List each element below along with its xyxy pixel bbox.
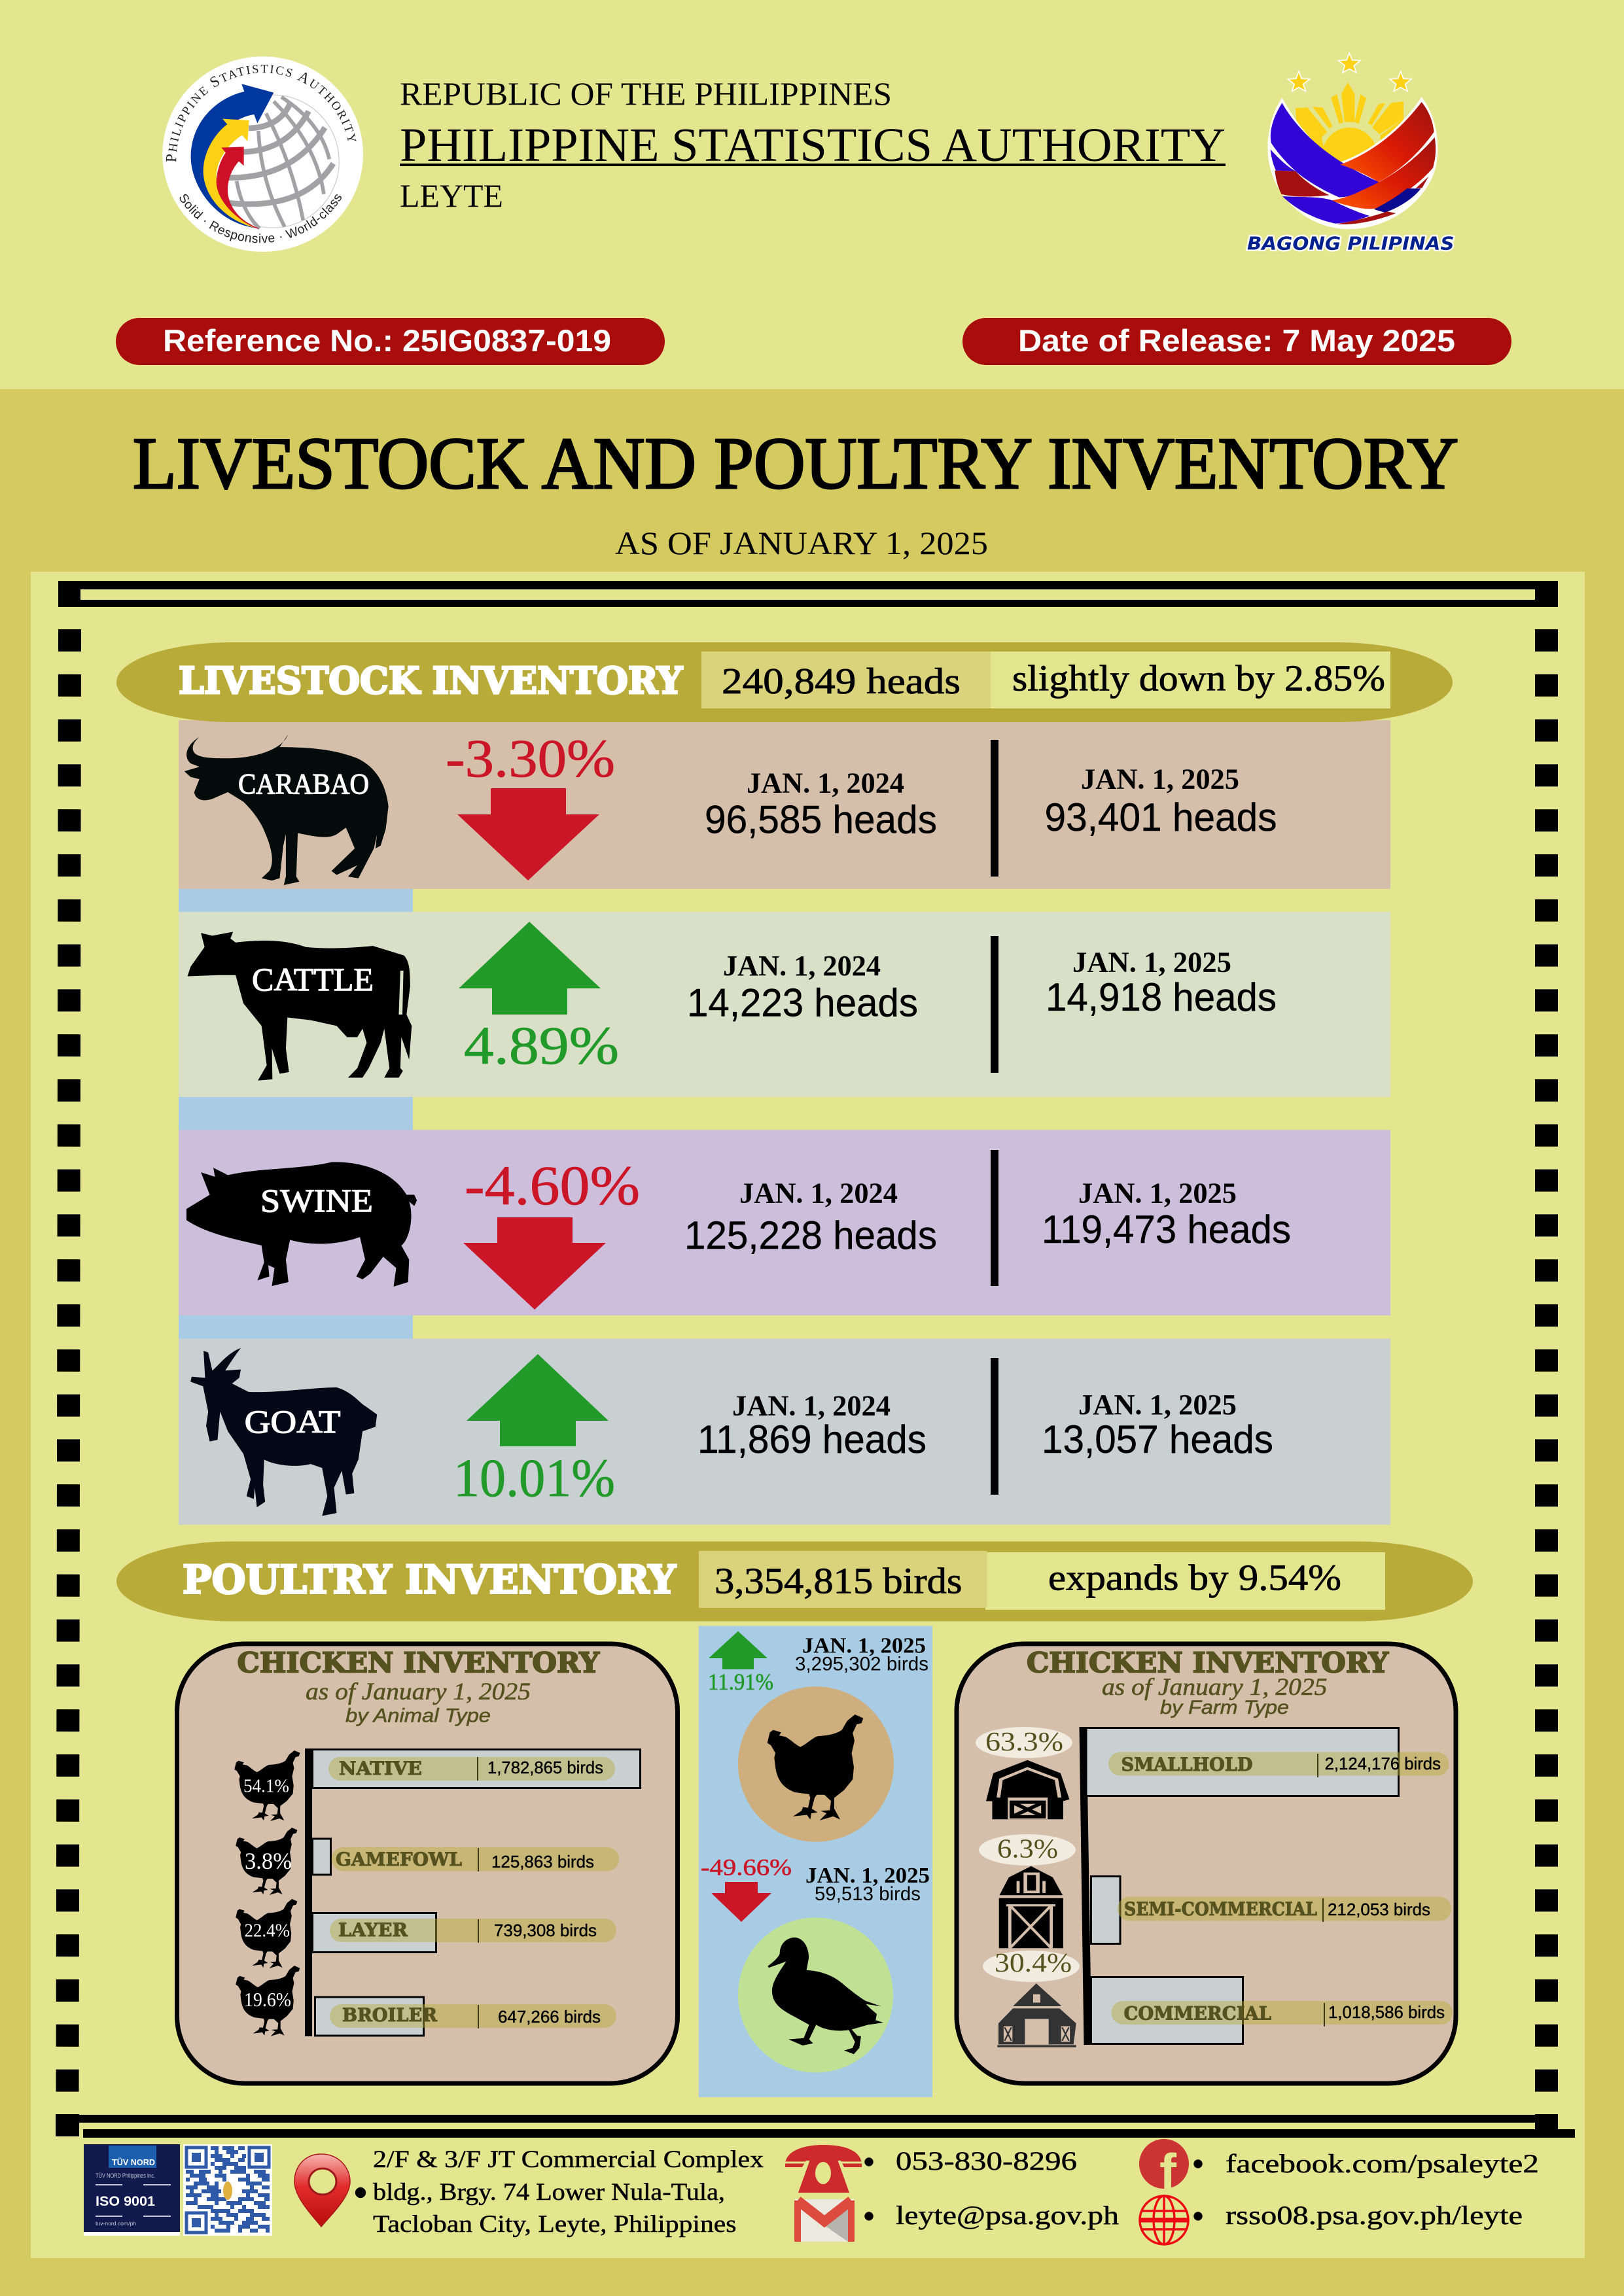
subheading bbox=[1102, 1674, 1327, 1718]
stat: cattle 2024 bbox=[687, 950, 918, 1024]
icon: facebook bbox=[1139, 2139, 1189, 2200]
bar: gamefowl: 125,863 birds bbox=[491, 1852, 594, 1871]
stat: carabao 2024 bbox=[705, 767, 937, 841]
icon: semi-commercial barn bbox=[999, 1866, 1063, 1948]
banner: poultry inventory: expands by 9.54% bbox=[1048, 1558, 1341, 1599]
bar: broiler: 647,266 birds bbox=[498, 2007, 601, 2026]
change: carabao percent: -3.30% bbox=[446, 728, 615, 788]
contact: website: rsso08.psa.gov.ph/leyte bbox=[1226, 2200, 1523, 2230]
arrow: carabao down bbox=[457, 788, 599, 880]
panel: chicken and duck totals bbox=[699, 1626, 932, 2097]
icon: gmail bbox=[794, 2199, 855, 2242]
banner: poultry inventory: POULTRY INVENTORY bbox=[183, 1557, 677, 1603]
stat: carabao 2025: JAN. 1, 2025 bbox=[1081, 763, 1239, 795]
bar: smallhold bbox=[1086, 1728, 1449, 1796]
stat: swine 2024: JAN. 1, 2024 bbox=[739, 1177, 898, 1209]
bar: smallhold: 2,124,176 birds bbox=[1325, 1754, 1441, 1773]
stat: goat 2025: JAN. 1, 2025 bbox=[1078, 1389, 1237, 1421]
badge: 63.3%: 63.3% bbox=[985, 1726, 1063, 1756]
stat: carabao 2025 bbox=[1044, 763, 1277, 839]
subheading: as of January 1, 2025 bbox=[1102, 1674, 1327, 1701]
pill: reference number bbox=[116, 318, 665, 365]
stat: goat 2025 bbox=[1042, 1389, 1273, 1461]
stat: cattle 2025: JAN. 1, 2025 bbox=[1072, 947, 1231, 979]
footer: ISO certificate badge bbox=[84, 2144, 180, 2236]
heading: chicken inventory: CHICKEN INVENTORY bbox=[1027, 1647, 1389, 1679]
badge: 6.3%: 6.3% bbox=[997, 1833, 1058, 1863]
stat: goat 2024: JAN. 1, 2024 bbox=[732, 1390, 891, 1422]
pill: reference number: Reference No.: 25IG0837-019 bbox=[163, 323, 611, 358]
heading: agency name block: REPUBLIC OF THE PHILIPPINES bbox=[400, 75, 892, 112]
bar: gamefowl: GAMEFOWL bbox=[336, 1849, 462, 1870]
stat: cattle 2024: 14,223 heads bbox=[687, 981, 918, 1024]
stat: swine 2025: 119,473 heads bbox=[1042, 1208, 1291, 1251]
contact: phone number bbox=[865, 2146, 1077, 2176]
bar: semi-commercial: 212,053 birds bbox=[1328, 1900, 1430, 1919]
text: office address: Tacloban City, Leyte, Philippines bbox=[373, 2211, 737, 2238]
stat: duck 2025 bbox=[805, 1864, 930, 1905]
icon: hen 3.8%: 3.8% bbox=[245, 1848, 292, 1874]
arrow: swine down bbox=[463, 1217, 606, 1310]
stat: chicken 2025 bbox=[795, 1634, 928, 1675]
bar: layer bbox=[313, 1913, 616, 1952]
stat: swine 2025: JAN. 1, 2025 bbox=[1078, 1177, 1237, 1209]
icon: swine silhouette bbox=[186, 1162, 417, 1287]
icon: hen 19.6% bbox=[236, 1966, 300, 2036]
icon: hen 54.1% bbox=[234, 1750, 300, 1821]
label: carabao: CARABAO bbox=[238, 768, 369, 800]
arrow: cattle up bbox=[459, 922, 601, 1015]
stat: carabao 2025: 93,401 heads bbox=[1044, 795, 1277, 839]
bar: broiler bbox=[315, 1997, 616, 2036]
badge: 6.3% bbox=[979, 1833, 1076, 1866]
stat: swine 2024 bbox=[684, 1177, 937, 1257]
logo: Philippine Statistics Authority seal: Solid · Responsive · World-class bbox=[179, 194, 342, 243]
subheading: by Animal Type bbox=[345, 1705, 491, 1727]
icon: location pin bbox=[294, 2154, 350, 2227]
logo: Philippine Statistics Authority seal: PHILIPPINE STATISTICS AUTHORITY bbox=[166, 65, 357, 162]
subheading: as of January 1, 2025 bbox=[306, 1679, 531, 1705]
chart axis bbox=[1080, 1727, 1091, 2045]
stat: duck 2025: JAN. 1, 2025 bbox=[805, 1864, 930, 1888]
subtitle: AS OF JANUARY 1, 2025 bbox=[615, 525, 988, 561]
label: goat: GOAT bbox=[245, 1403, 341, 1440]
stat: cattle 2025 bbox=[1046, 947, 1277, 1019]
icon: globe bbox=[1140, 2196, 1188, 2244]
logo: Bagong Pilipinas: BAGONG PILIPINAS bbox=[1247, 233, 1455, 254]
logo: Philippine Statistics Authority seal bbox=[162, 56, 363, 252]
text: office address: 2/F & 3/F JT Commercial Complex bbox=[373, 2146, 764, 2173]
footer: QR code bbox=[183, 2144, 272, 2236]
bar: broiler: BROILER bbox=[342, 2004, 438, 2026]
contact: email: leyte@psa.gov.ph bbox=[896, 2200, 1119, 2230]
panel: swine row bbox=[179, 1130, 1390, 1315]
subheading: by Farm Type bbox=[1160, 1697, 1289, 1718]
panel: goat row bbox=[179, 1338, 1390, 1525]
panel: chicken inventory by animal type bbox=[177, 1644, 678, 2083]
heading: agency name block: LEYTE bbox=[400, 177, 503, 214]
icon: goat silhouette bbox=[190, 1348, 377, 1516]
subheading bbox=[306, 1679, 531, 1727]
badge: 30.4%: 30.4% bbox=[995, 1947, 1072, 1977]
title: LIVESTOCK AND POULTRY INVENTORY bbox=[133, 423, 1458, 504]
stat: goat 2024: 11,869 heads bbox=[697, 1418, 927, 1461]
icon: telephone bbox=[785, 2145, 862, 2193]
banner: livestock inventory bbox=[116, 642, 1453, 722]
panel: carabao row bbox=[179, 720, 1390, 889]
stat: carabao 2024: JAN. 1, 2024 bbox=[747, 767, 904, 799]
change: goat percent: 10.01% bbox=[453, 1448, 615, 1508]
bar: gamefowl bbox=[313, 1839, 619, 1875]
banner: poultry inventory: 3,354,815 birds bbox=[715, 1561, 962, 1601]
footer: ISO certificate badge: TÜV NORD bbox=[112, 2157, 155, 2167]
pill: date of release: Date of Release: 7 May 2025 bbox=[1018, 323, 1455, 358]
arrow: goat up bbox=[467, 1354, 609, 1446]
stat: swine 2025 bbox=[1042, 1177, 1291, 1251]
banner: poultry inventory bbox=[116, 1541, 1473, 1621]
icon: cattle silhouette bbox=[188, 931, 412, 1081]
footer: ISO certificate badge: tuv-nord.com/ph bbox=[96, 2221, 136, 2227]
bar: layer: 739,308 birds bbox=[494, 1921, 597, 1940]
chart axis bbox=[305, 1748, 312, 2036]
icon: hen 19.6%: 19.6% bbox=[244, 1988, 291, 2011]
footer: ISO certificate badge: ISO 9001 bbox=[96, 2194, 155, 2209]
banner: livestock inventory: slightly down by 2.85% bbox=[1012, 658, 1385, 699]
heading: agency name block: PHILIPPINE STATISTICS AUTHORITY bbox=[400, 118, 1226, 171]
bar: native: 1,782,865 birds bbox=[487, 1758, 603, 1777]
label: cattle: CATTLE bbox=[252, 961, 374, 998]
bar: native bbox=[313, 1749, 640, 1788]
icon: facebook: f bbox=[1159, 2143, 1177, 2200]
icon: chicken in circle bbox=[738, 1686, 894, 1842]
stat: goat 2024 bbox=[697, 1390, 927, 1461]
logo: Bagong Pilipinas bbox=[1247, 54, 1455, 254]
bar: semi-commercial bbox=[1091, 1876, 1451, 1944]
heading: chicken inventory: CHICKEN INVENTORY bbox=[237, 1647, 600, 1679]
icon: hen 22.4% bbox=[236, 1899, 297, 1968]
panel: cattle row bbox=[179, 912, 1390, 1097]
change: duck percent: -49.66% bbox=[701, 1854, 792, 1880]
icon: smallhold barn bbox=[986, 1760, 1069, 1819]
stat: cattle 2024: JAN. 1, 2024 bbox=[723, 950, 881, 982]
bar: semi-commercial: SEMI-COMMERCIAL bbox=[1124, 1898, 1317, 1920]
icon: hen 22.4%: 22.4% bbox=[245, 1921, 290, 1941]
stat: carabao 2024: 96,585 heads bbox=[705, 798, 937, 841]
divider: goat bbox=[991, 1358, 998, 1495]
banner: livestock inventory: LIVESTOCK INVENTORY bbox=[179, 659, 683, 703]
badge: 63.3% bbox=[976, 1726, 1072, 1758]
panel: chicken inventory by farm type bbox=[957, 1644, 1456, 2083]
text: office address bbox=[355, 2146, 764, 2238]
label: swine: SWINE bbox=[260, 1182, 373, 1219]
heading: agency name block bbox=[400, 75, 1226, 214]
change: cattle percent: 4.89% bbox=[464, 1015, 619, 1075]
bar: commercial: COMMERCIAL bbox=[1124, 2003, 1271, 2025]
text: office address: bldg., Brgy. 74 Lower Nula-Tula, bbox=[373, 2179, 725, 2206]
bar: layer: LAYER bbox=[338, 1919, 408, 1941]
stat: duck 2025: 59,513 birds bbox=[815, 1883, 921, 1905]
bar: commercial bbox=[1091, 1977, 1453, 2044]
icon: carabao silhouette bbox=[185, 735, 389, 885]
bar: smallhold: SMALLHOLD bbox=[1121, 1754, 1252, 1775]
change: chicken percent: 11.91% bbox=[708, 1669, 773, 1695]
bar: native: NATIVE bbox=[339, 1758, 422, 1779]
badge: 30.4% bbox=[983, 1947, 1080, 1982]
icon: commercial barn bbox=[997, 1983, 1076, 2047]
change: swine percent: -4.60% bbox=[465, 1154, 640, 1217]
divider: cattle bbox=[991, 936, 998, 1073]
stat: chicken 2025: 3,295,302 birds bbox=[795, 1654, 928, 1675]
stat: cattle 2025: 14,918 heads bbox=[1046, 975, 1277, 1019]
blue strips behind rows bbox=[179, 888, 413, 1339]
divider: swine bbox=[991, 1150, 998, 1286]
divider: carabao bbox=[991, 740, 998, 877]
stat: swine 2024: 125,228 heads bbox=[684, 1213, 937, 1257]
contact: phone number: 053-830-8296 bbox=[896, 2146, 1077, 2176]
footer: ISO certificate badge: TÜV NORD Philippines Inc. bbox=[96, 2172, 155, 2179]
icon: hen 54.1%: 54.1% bbox=[243, 1776, 289, 1797]
stat: chicken 2025: JAN. 1, 2025 bbox=[802, 1634, 926, 1658]
icon: hen 3.8% bbox=[236, 1828, 297, 1895]
bar: commercial: 1,018,586 birds bbox=[1328, 2002, 1445, 2022]
contact: facebook: facebook.com/psaleyte2 bbox=[1226, 2149, 1539, 2178]
banner: livestock inventory: 240,849 heads bbox=[722, 661, 961, 702]
arrow: duck down bbox=[711, 1882, 771, 1922]
film strip frame bbox=[56, 581, 1575, 2138]
arrow: chicken up bbox=[709, 1631, 768, 1669]
icon: duck in circle bbox=[738, 1918, 893, 2072]
pill: date of release bbox=[962, 318, 1511, 365]
stat: goat 2025: 13,057 heads bbox=[1042, 1418, 1273, 1461]
